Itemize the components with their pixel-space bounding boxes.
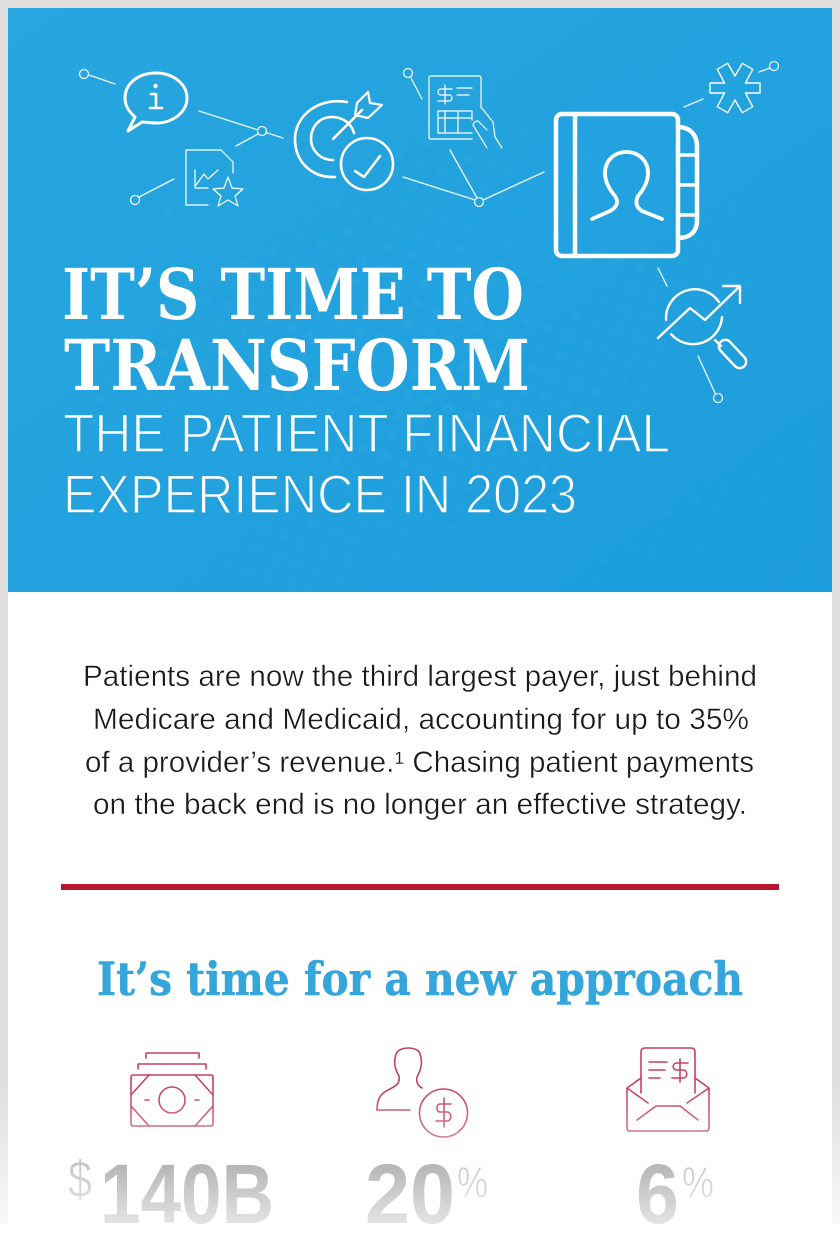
value: 6%: % xyxy=(682,1158,714,1207)
value: $140B: 140B xyxy=(100,1147,274,1241)
intro paragraph: Patients are now the third largest payer, just behind xyxy=(83,660,757,693)
icon: chart document with star xyxy=(186,150,243,206)
value: 20%: 20 xyxy=(365,1147,455,1241)
icon: magnifier with rising arrow xyxy=(658,286,749,371)
intro paragraph: Medicare and Medicaid, accounting for up to 35% xyxy=(93,703,749,736)
header banner xyxy=(8,8,832,592)
icon: open envelope with bill xyxy=(627,1048,709,1131)
icon: medical asterisk xyxy=(710,63,760,113)
value: 20%: % xyxy=(457,1158,488,1207)
icon: address book with person xyxy=(556,114,697,256)
network of header icons xyxy=(80,62,778,402)
intro paragraph xyxy=(83,660,757,821)
title xyxy=(62,253,670,525)
value: $140B: $ xyxy=(68,1151,92,1209)
stat: 140B xyxy=(68,1053,274,1241)
icon: info speech bubble xyxy=(125,73,187,131)
title: EXPERIENCE IN 2023 xyxy=(63,463,577,525)
stat: 6% xyxy=(627,1048,714,1241)
title: TRANSFORM xyxy=(64,324,530,407)
intro paragraph: on the back end is no longer an effective strategy. xyxy=(93,788,747,821)
icon: stack of money xyxy=(131,1053,213,1126)
connector lines and nodes xyxy=(80,62,778,402)
value: 6%: 6 xyxy=(636,1147,679,1241)
title: THE PATIENT FINANCIAL xyxy=(63,402,670,464)
section heading: It’s time for a new approach xyxy=(97,952,743,1006)
icon: target with arrow and check mark xyxy=(295,92,393,190)
icon: person with dollar coin xyxy=(377,1048,468,1137)
intro paragraph: of a provider’s revenue.¹ Chasing patient payments xyxy=(85,746,754,779)
stat: 20% xyxy=(365,1048,488,1241)
red divider xyxy=(61,884,779,890)
icon: bill with table and hand xyxy=(429,76,502,148)
title: IT’S TIME TO xyxy=(62,253,524,336)
value: 6% xyxy=(636,1147,714,1241)
white fade over the bottom xyxy=(0,1085,840,1260)
white content panel xyxy=(8,592,832,1260)
